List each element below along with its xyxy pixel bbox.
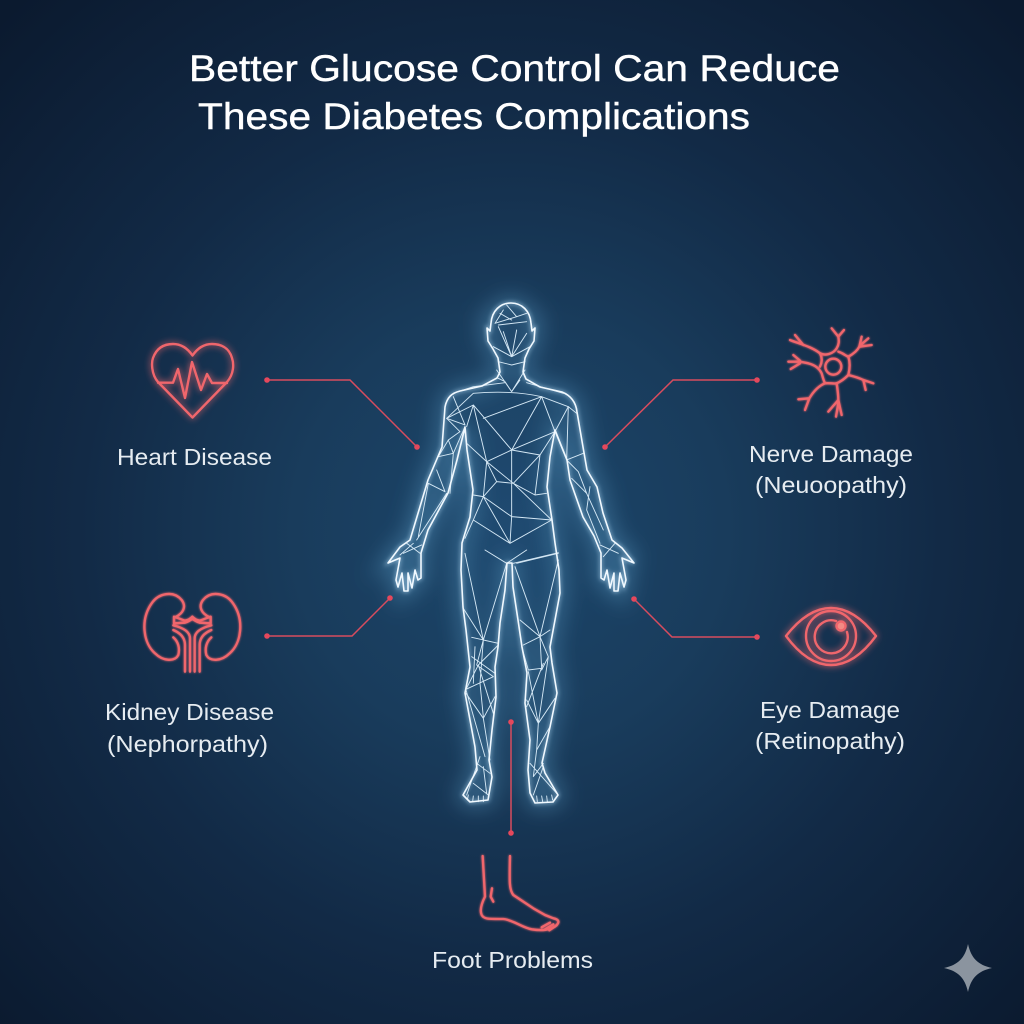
connector: nerve damage [602, 377, 760, 450]
label: foot problems: Foot Problems [432, 947, 593, 973]
title [189, 47, 840, 137]
icon: foot [481, 856, 558, 930]
label: nerve damage: Nerve Damage [749, 441, 913, 467]
label: kidney disease: Kidney Disease [105, 699, 274, 725]
title: These Diabetes Complications [198, 95, 750, 137]
icon: kidneys [144, 594, 240, 672]
icon: eye [786, 608, 876, 665]
connector: kidney disease [264, 595, 393, 639]
human body wireframe figure [388, 303, 634, 803]
label: nerve damage: (Neuoopathy) [755, 472, 907, 498]
connector: foot problems [508, 719, 514, 836]
connector: eye damage [631, 596, 760, 640]
label: heart disease: Heart Disease [117, 444, 272, 470]
icon: heart with ECG [152, 344, 233, 418]
label: kidney disease: (Nephorpathy) [107, 731, 268, 757]
title: Better Glucose Control Can Reduce [189, 47, 840, 89]
connector: heart disease [264, 377, 420, 450]
label: nerve damage [749, 441, 913, 498]
label: kidney disease [105, 699, 274, 757]
label: eye damage: (Retinopathy) [755, 728, 905, 754]
label: eye damage: Eye Damage [760, 697, 900, 723]
icon: nerve cell [788, 328, 873, 417]
label: eye damage [755, 697, 905, 754]
icon: sparkle watermark [944, 944, 992, 992]
